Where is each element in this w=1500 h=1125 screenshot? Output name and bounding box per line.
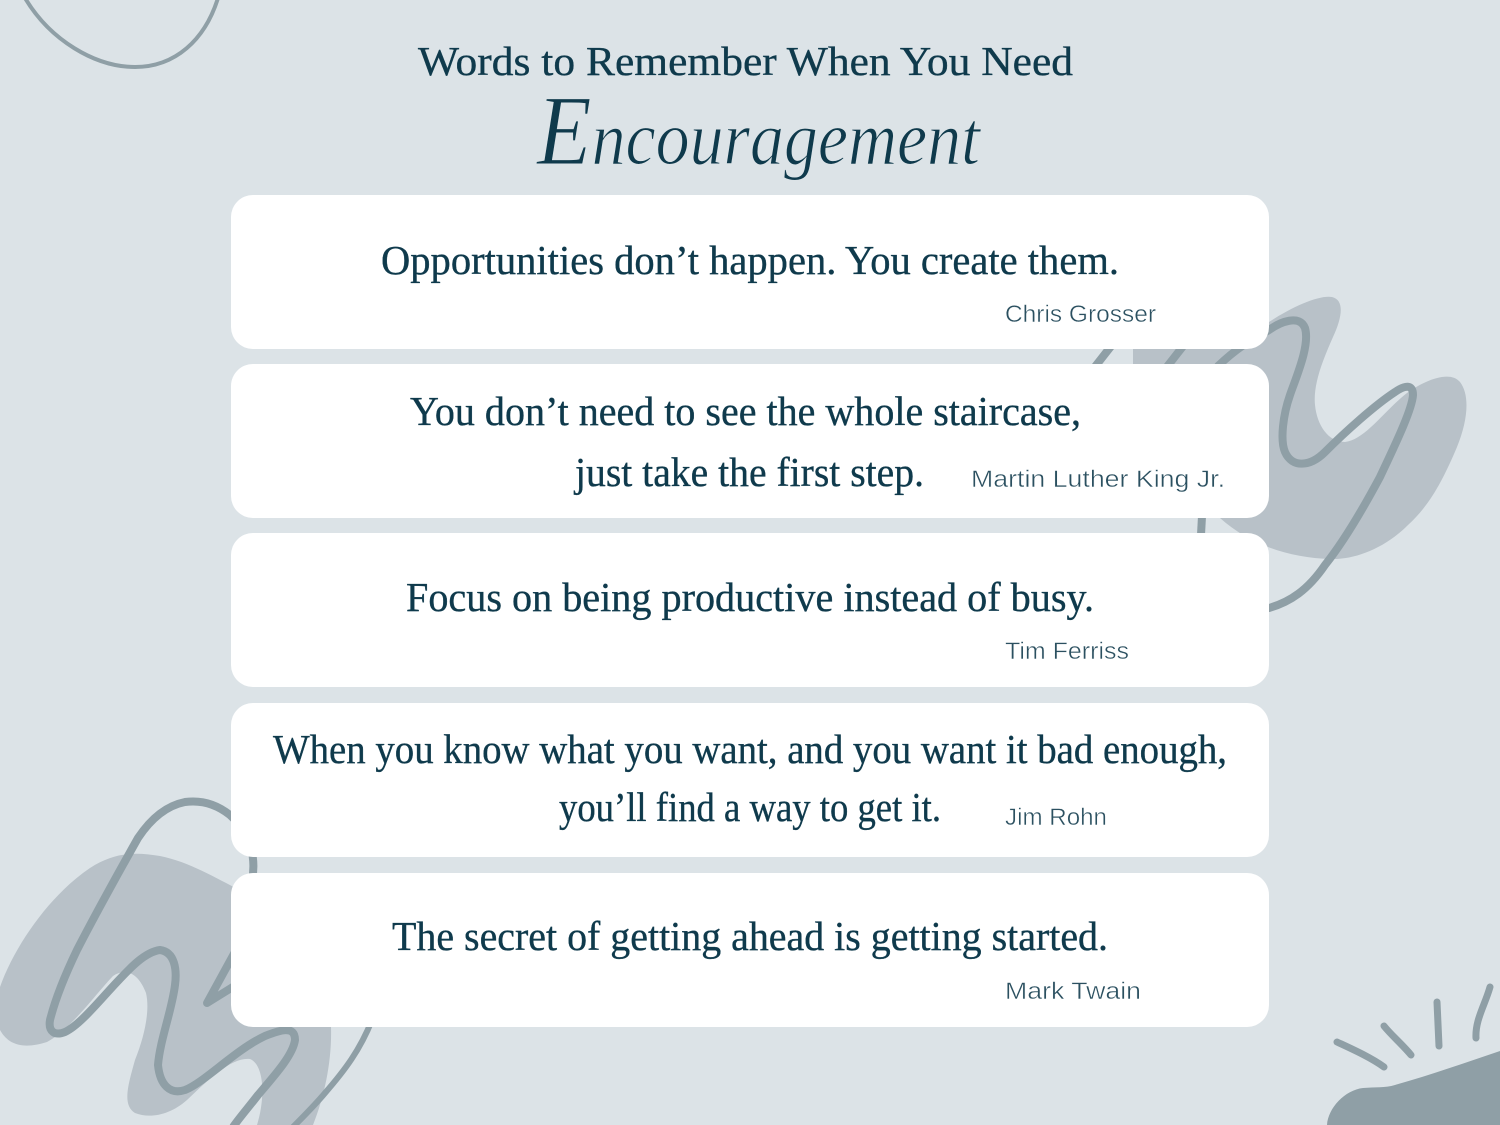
- card 3: Focus on being productive instead of busy.: [406, 574, 1094, 620]
- card 1: Opportunities don’t happen. You create them.: [381, 237, 1119, 283]
- card 2: [231, 364, 1269, 518]
- card 5: Mark Twain: [1005, 978, 1141, 1005]
- card 4: Jim Rohn: [1005, 804, 1107, 831]
- card 1: [231, 195, 1269, 349]
- decoration: bottom-right sun: [1327, 987, 1500, 1125]
- decoration: bottom-left blob and squiggle: [0, 801, 372, 1125]
- card 1: Chris Grosser: [1005, 301, 1156, 328]
- decoration: right blob and squiggle: [1094, 297, 1466, 608]
- decoration: top-left arc: [25, 0, 218, 67]
- card 3: [231, 533, 1269, 687]
- script heading: Encouragement: [535, 75, 982, 186]
- card 2: just take the first step.: [573, 449, 924, 495]
- card 5: [231, 873, 1269, 1027]
- card 3: Tim Ferriss: [1005, 638, 1129, 665]
- card 5: The secret of getting ahead is getting started.: [392, 913, 1108, 959]
- title: Words to Remember When You Need: [418, 38, 1073, 84]
- card 4: [231, 703, 1269, 857]
- card 4: you’ll find a way to get it.: [559, 784, 941, 830]
- card 4: When you know what you want, and you want it bad enough,: [273, 726, 1227, 772]
- card 2: You don’t need to see the whole staircase,: [410, 388, 1081, 434]
- card 2: Martin Luther King Jr.: [971, 466, 1225, 493]
